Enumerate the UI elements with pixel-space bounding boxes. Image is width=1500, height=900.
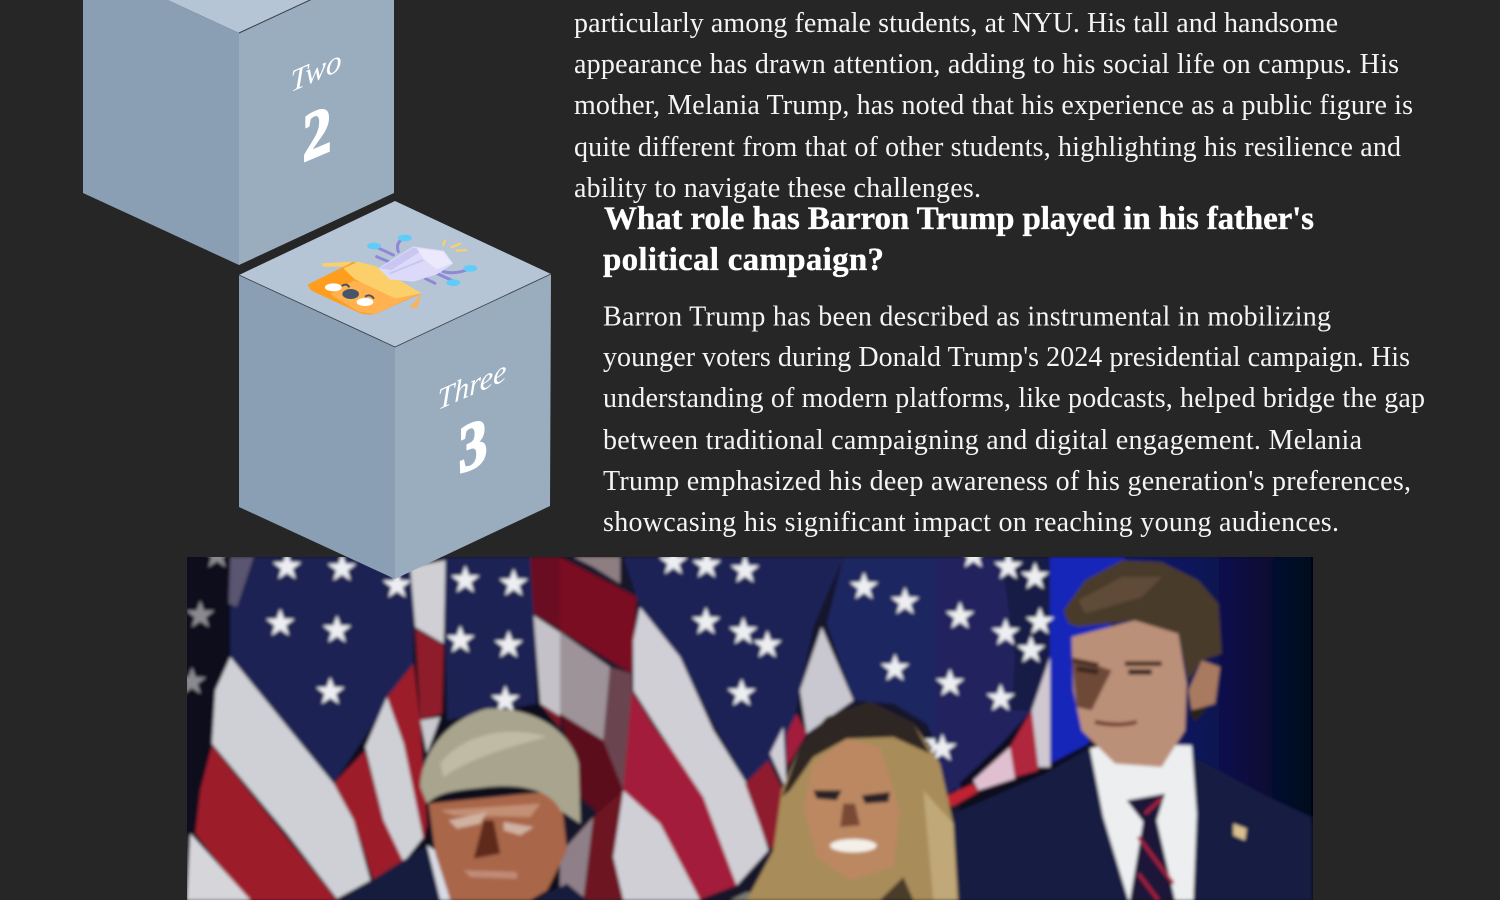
cube two — [83, 0, 394, 265]
Barron Trump — [953, 560, 1312, 900]
text block: campaign role answer: Barron Trump has been described as instrumental in mobilizing — [603, 302, 1331, 332]
text block: campaign role answer: between traditional campaigning and digital engagement. Melania — [603, 425, 1363, 456]
text block: Barron at NYU: mother, Melania Trump, has noted that his experience as a public figure is — [574, 90, 1413, 121]
label: Two: Two — [290, 43, 342, 100]
flags backdrop left — [178, 540, 567, 900]
cube three right face — [395, 274, 551, 579]
flags backdrop centre — [560, 547, 960, 900]
text block: campaign role answer: showcasing his significant impact on reaching young audiences. — [603, 507, 1339, 538]
number: 2: 2 — [303, 91, 331, 178]
cube two left face — [83, 0, 239, 265]
text block: Barron at NYU: appearance has drawn attention, adding to his social life on campus. His — [574, 49, 1399, 80]
cube two top face — [83, 0, 394, 33]
Donald Trump — [340, 709, 587, 900]
photo: Donald, Melania and Barron Trump in front of American flags — [178, 540, 1320, 900]
heading: campaign role question: What role has Barron Trump played in his father's — [604, 201, 1314, 237]
number: 3: 3 — [459, 403, 487, 490]
cube three left face — [239, 275, 395, 579]
Melania Trump — [730, 702, 958, 900]
text block: campaign role answer: Trump emphasized his deep awareness of his generation's preferences, — [603, 466, 1411, 497]
cube three top face — [239, 201, 551, 347]
label: Three: Three — [438, 353, 506, 417]
text block: Barron at NYU — [574, 8, 1413, 204]
heading: campaign role question: political campaign? — [603, 242, 884, 278]
heading: campaign role question — [603, 201, 1314, 278]
text block: campaign role answer — [603, 302, 1425, 538]
cube two right face — [239, 0, 394, 265]
text block: Barron at NYU: particularly among female students, at NYU. His tall and handsome — [574, 8, 1338, 39]
text block: Barron at NYU: quite different from that of other students, highlighting his resilience and — [574, 132, 1401, 163]
cube three — [239, 201, 551, 579]
icon: open box with gadget — [308, 235, 477, 314]
flags backdrop right — [928, 540, 1315, 824]
text block: campaign role answer: understanding of modern platforms, like podcasts, helped bridge the gap — [603, 383, 1425, 414]
text block: Barron at NYU: ability to navigate these challenges. — [574, 173, 981, 204]
text block: campaign role answer: younger voters during Donald Trump's 2024 presidential campaign. His — [603, 342, 1410, 373]
